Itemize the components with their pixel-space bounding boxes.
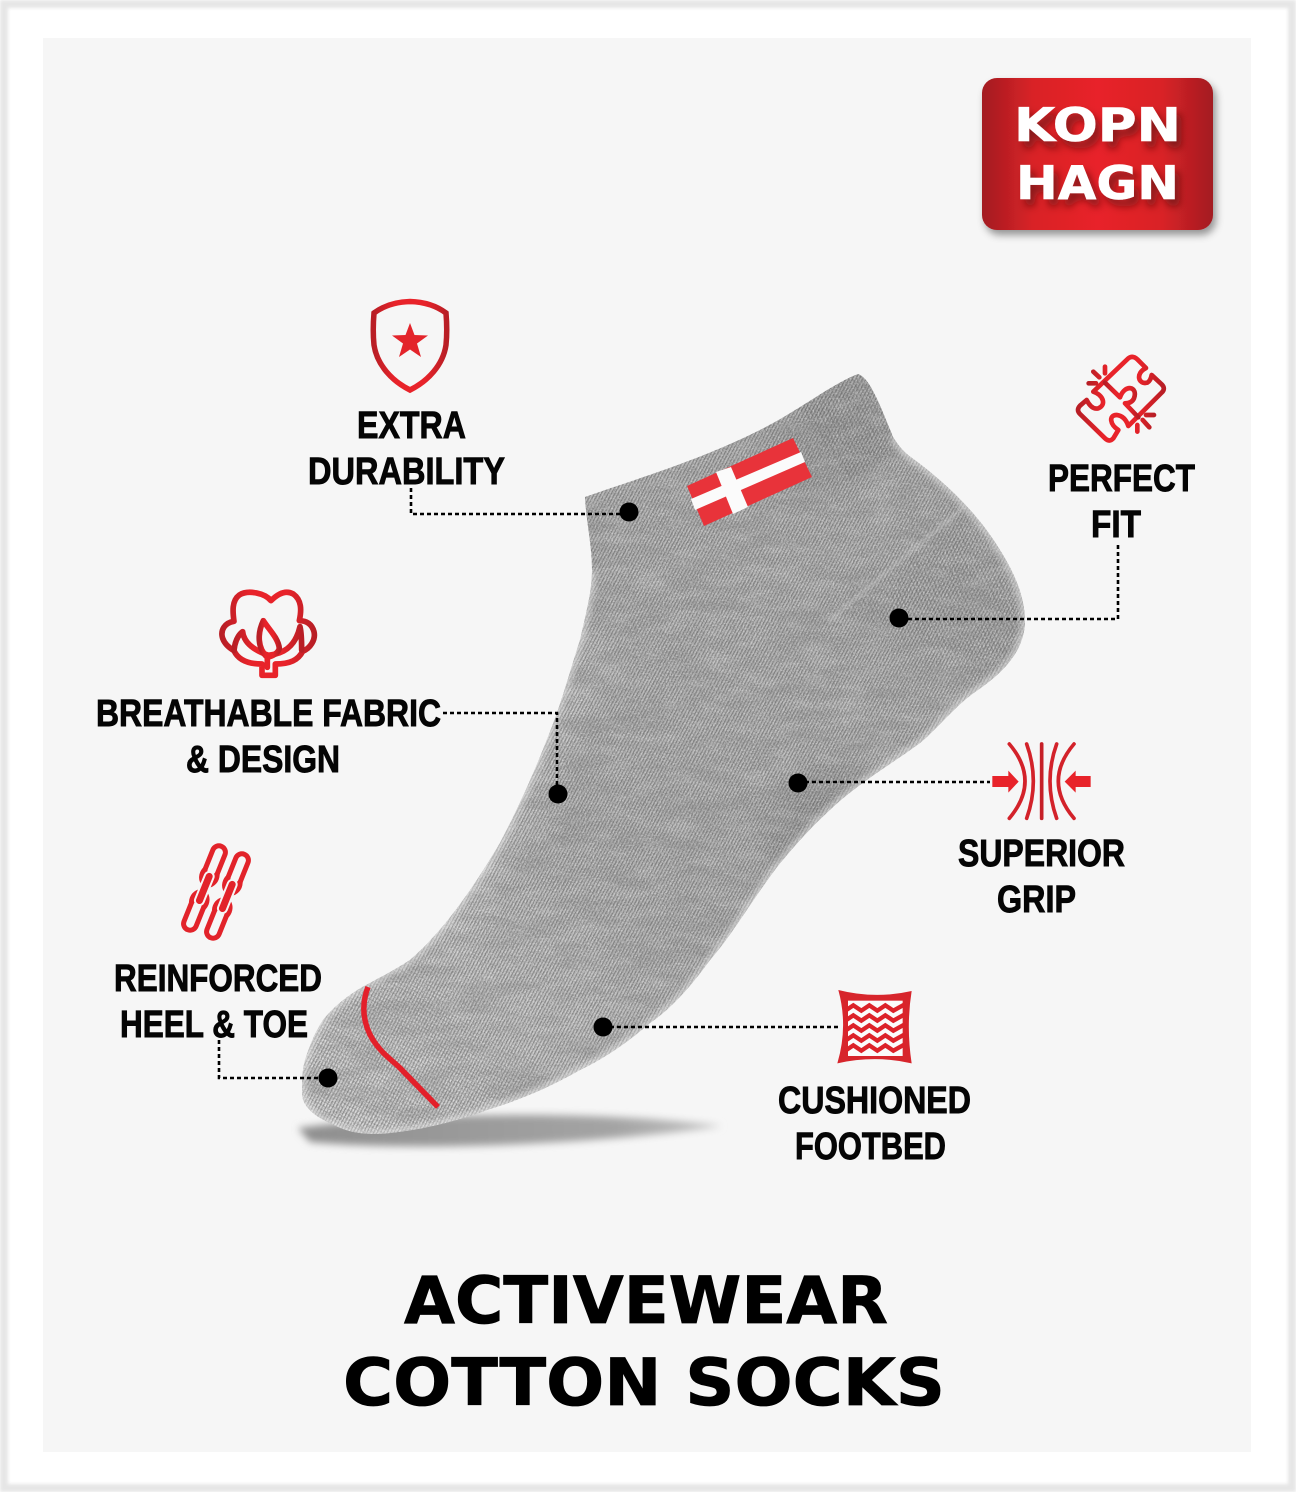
label: extra durability (308, 405, 505, 493)
logo badge: KOPN HAGN: HAGN (1016, 156, 1179, 210)
label: reinforced heel and toe: HEEL & TOE (120, 1004, 308, 1046)
leader: perfect fit (890, 545, 1118, 628)
label: extra durability: DURABILITY (308, 451, 505, 493)
leader: breathable fabric (443, 713, 568, 804)
icon: compression arrows (992, 744, 1091, 818)
label: extra durability: EXTRA (357, 405, 466, 447)
leader: superior grip (788, 774, 990, 792)
icon: shield with star (373, 302, 447, 390)
shadow under the sock (298, 1115, 722, 1146)
toe stripe (364, 987, 438, 1107)
title (343, 1264, 945, 1421)
label: cushioned footbed: CUSHIONED (778, 1080, 971, 1122)
label: breathable fabric and design (96, 693, 441, 781)
soft bright rim (302, 437, 1025, 1134)
label: perfect fit: PERFECT (1048, 458, 1195, 500)
icon: chain links (178, 843, 254, 941)
leader: extra durability (411, 488, 638, 522)
label: superior grip (958, 833, 1125, 921)
label: cushioned footbed: FOOTBED (795, 1126, 946, 1168)
label: cushioned footbed (778, 1080, 971, 1168)
label: reinforced heel and toe: REINFORCED (114, 958, 322, 1000)
icon: puzzle pieces (1078, 357, 1164, 440)
icon: cushion (837, 990, 912, 1063)
logo badge: KOPN HAGN (982, 78, 1213, 230)
label: perfect fit: FIT (1091, 504, 1141, 546)
title: ACTIVEWEAR (404, 1264, 888, 1339)
leader: reinforced heel and toe (219, 1040, 338, 1088)
title: COTTON SOCKS (343, 1346, 945, 1421)
flag patch (687, 438, 812, 526)
label: superior grip: SUPERIOR (958, 833, 1125, 875)
label: superior grip: GRIP (997, 879, 1076, 921)
label: breathable fabric and design: & DESIGN (186, 739, 340, 781)
label: reinforced heel and toe (114, 958, 322, 1046)
broad tonal shading (762, 766, 852, 857)
logo badge: KOPN HAGN: KOPN (1014, 98, 1181, 152)
leader: cushioned footbed (594, 1018, 838, 1036)
label: breathable fabric and design: BREATHABLE FABRIC (96, 693, 441, 735)
icon: cotton boll (222, 592, 314, 675)
sock illustration (280, 360, 1040, 1150)
label: perfect fit (1048, 458, 1195, 546)
light seam lines (828, 506, 965, 622)
